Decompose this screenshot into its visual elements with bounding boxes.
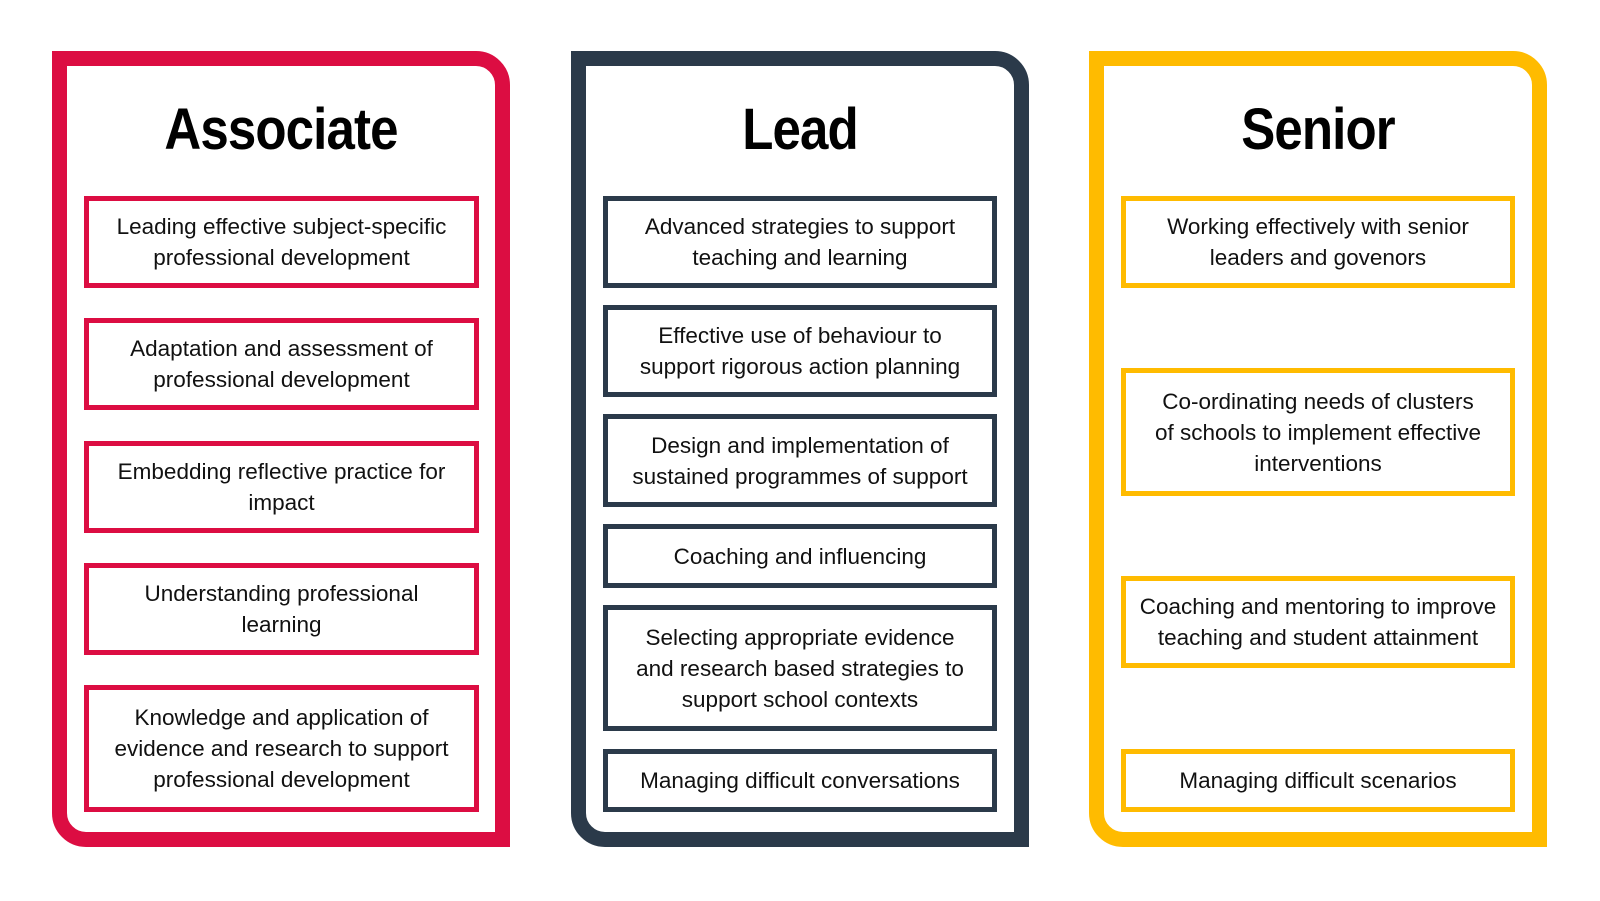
box: Associate 4	[84, 563, 479, 655]
box: Lead 6: Managing difficult conversations	[640, 768, 960, 793]
box: Associate 1: professional development	[153, 245, 410, 270]
panel: Lead	[571, 51, 1029, 847]
box: Associate 5: professional development	[153, 767, 410, 792]
box: Associate 3	[84, 441, 479, 533]
box: Senior 1: leaders and govenors	[1210, 245, 1426, 270]
box: Lead 2	[603, 305, 997, 397]
box: Lead 2: Effective use of behaviour to	[658, 323, 942, 348]
box: Lead 1	[603, 196, 997, 288]
box: Lead 5	[603, 605, 997, 731]
box: Senior 2: of schools to implement effective	[1155, 420, 1481, 444]
box: Associate 4: learning	[241, 612, 322, 637]
box: Lead 4: Coaching and influencing	[674, 544, 926, 568]
box: Senior 2	[1121, 368, 1515, 496]
box: Senior 2: Co-ordinating needs of clusters	[1162, 388, 1474, 414]
box: Associate 3: impact	[248, 490, 315, 515]
heading: Lead: Lead	[742, 97, 858, 162]
box: Associate 5	[84, 685, 479, 812]
box: Lead 3	[603, 414, 997, 507]
box: Senior 1	[1121, 196, 1515, 288]
box: Senior 3: Coaching and mentoring to improve	[1140, 594, 1496, 619]
box: Associate 2: professional development	[153, 367, 410, 392]
box: Lead 5: Selecting appropriate evidence	[646, 624, 954, 650]
box: Associate 2: Adaptation and assessment of	[130, 336, 433, 361]
box: Lead 5: and research based strategies to	[636, 656, 964, 680]
box: Associate 4: Understanding professional	[145, 581, 418, 606]
box: Associate 5: Knowledge and application of	[134, 705, 428, 730]
box: Lead 6	[603, 749, 997, 812]
box: Associate 5: evidence and research to support	[115, 736, 448, 761]
box: Senior 4	[1121, 749, 1515, 812]
panel: Senior	[1089, 51, 1547, 847]
heading: Associate: Associate	[164, 97, 398, 162]
box: Lead 4	[603, 524, 997, 588]
box: Associate 1: Leading effective subject-specific	[117, 214, 446, 239]
box: Associate 2	[84, 318, 479, 410]
box: Associate 1	[84, 196, 479, 288]
box: Lead 1: teaching and learning	[692, 245, 908, 270]
box: Lead 1: Advanced strategies to support	[645, 214, 955, 239]
panel: Associate	[52, 51, 510, 847]
box: Senior 4: Managing difficult scenarios	[1179, 768, 1457, 793]
box: Lead 5: support school contexts	[682, 686, 918, 712]
box: Senior 2: interventions	[1254, 450, 1382, 476]
box: Senior 3	[1121, 576, 1515, 668]
box: Lead 2: support rigorous action planning	[640, 354, 960, 379]
heading: Senior: Senior	[1241, 97, 1395, 162]
box: Associate 3: Embedding reflective practice for	[118, 459, 445, 484]
box: Lead 3: Design and implementation of	[651, 432, 949, 458]
box: Senior 1: Working effectively with senior	[1167, 214, 1469, 239]
box: Senior 3: teaching and student attainment	[1158, 625, 1478, 650]
box: Lead 3: sustained programmes of support	[632, 464, 968, 488]
